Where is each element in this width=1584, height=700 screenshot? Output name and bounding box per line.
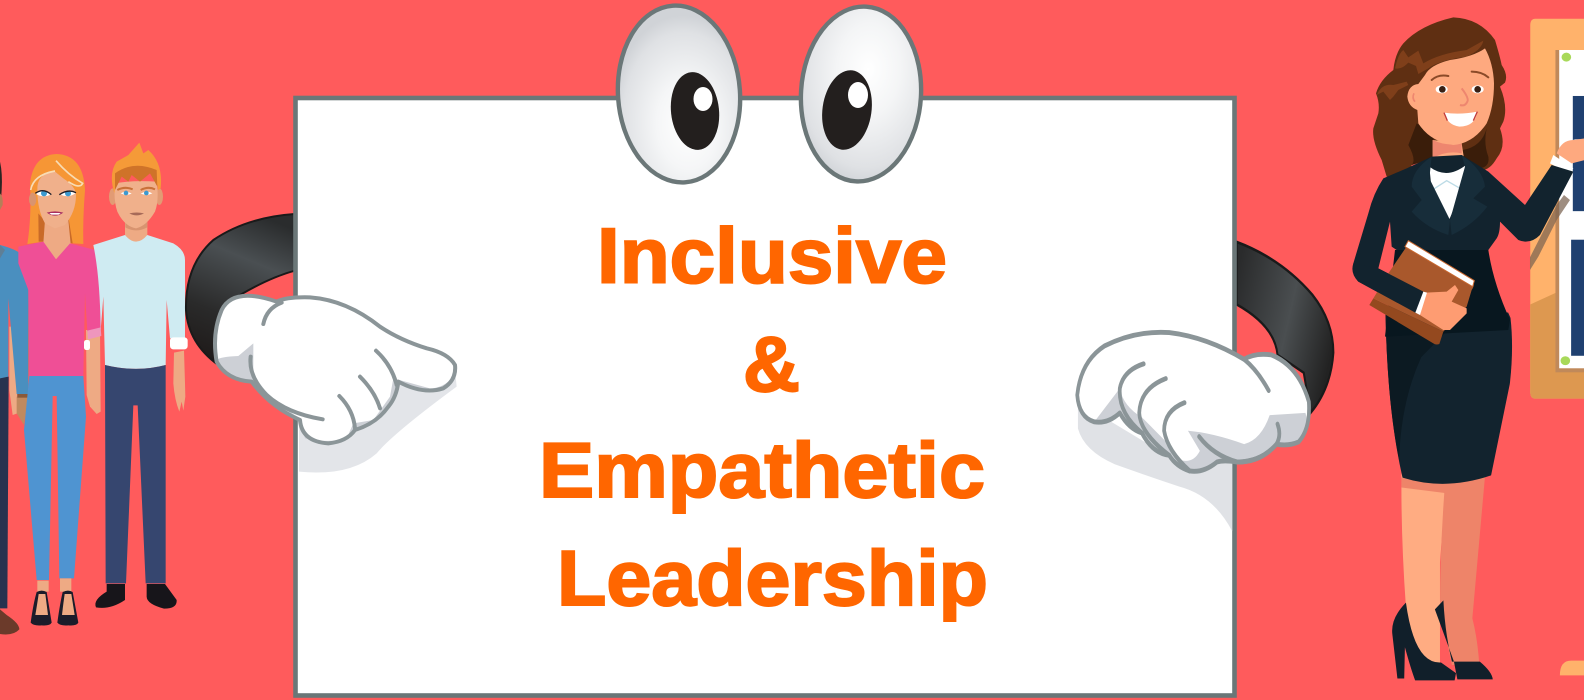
presentation board [1530,19,1584,399]
group of people [0,143,188,634]
right pointing glove [1077,332,1309,531]
presenter woman [1352,17,1584,680]
corner orange shape [1560,661,1584,675]
pointing hand [1550,138,1584,173]
title [539,212,988,622]
title: & [743,320,800,408]
hair [1373,17,1506,178]
book and hand [1353,241,1474,345]
right eye [796,3,926,185]
left eye [612,1,746,187]
legs and skirt [1385,312,1512,680]
character: right arm [1237,242,1333,413]
suit jacket [1352,155,1573,337]
title: Empathetic [539,426,985,514]
white sign board [296,98,1234,696]
arm shadow on presentation board [1530,195,1570,270]
left pointing glove [215,296,457,473]
person: man in light blue shirt [93,143,188,609]
title: Inclusive [597,212,947,300]
character: left arm [186,214,295,365]
person: man in blue cut off at left [0,162,28,634]
person: woman in pink top [18,154,101,625]
title: Leadership [557,534,988,622]
face [1407,48,1494,172]
